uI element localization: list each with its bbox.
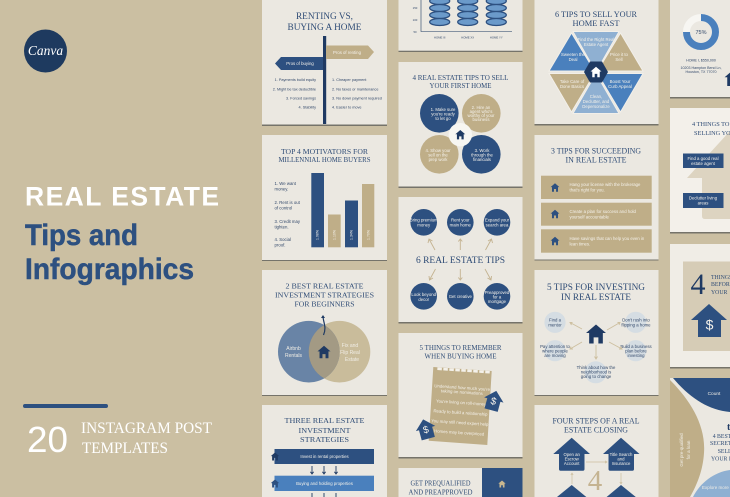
- axes: [421, 0, 512, 32]
- number 4: 4: [588, 465, 603, 497]
- tip 3: lean times.: [570, 242, 590, 246]
- list: renting: 4. Easier to move: [332, 106, 362, 110]
- circle labels: investing: [628, 353, 645, 358]
- logo: Canva: [24, 30, 67, 72]
- list: buying: 4. Stability: [298, 106, 316, 110]
- heading: tips and: Tips and: [25, 219, 138, 252]
- coin stacks: [430, 0, 506, 26]
- petal: 3: 4. Show your: [425, 148, 451, 153]
- title: GET PREQUALIFIED: [410, 478, 471, 488]
- panel: 4 things to consider: [670, 108, 730, 234]
- address text: Houston, TX 77070: [686, 70, 716, 74]
- circle labels: Build a business: [620, 344, 652, 349]
- panel: 2 best strategies: [262, 270, 387, 396]
- axis labels: 150: [413, 6, 418, 10]
- list: renting: 1. Cheaper payment: [332, 78, 367, 82]
- title: MILLENNIAL HOME BUYERS: [278, 155, 370, 164]
- side label: [679, 433, 691, 467]
- title: 4 REAL ESTATE TIPS TO SELL: [412, 74, 508, 82]
- light blue bottom shape: [693, 470, 730, 497]
- panel: 5 tips for investing: [534, 270, 658, 396]
- icon: house cut off: [725, 70, 730, 86]
- subtitle: INSTAGRAM POST: [81, 420, 213, 437]
- title: [288, 11, 362, 32]
- panel: 4 best secrets: [670, 378, 730, 497]
- tip box 2: areas: [698, 200, 708, 206]
- step house 3: [553, 485, 590, 497]
- title: 3 TIPS FOR SUCCEEDING: [551, 146, 641, 156]
- step house 1: Account: [564, 461, 580, 466]
- note paper: [429, 367, 493, 445]
- tip 1: that's right for you.: [570, 188, 605, 192]
- tip box 2: Declutter living: [689, 196, 718, 200]
- petal: 3: [420, 135, 459, 174]
- top label: Count: [708, 391, 721, 397]
- list: buying: 1. Payments build equity: [275, 78, 316, 82]
- petal: 1: to let go: [435, 116, 451, 121]
- petal: 3: sell on the: [428, 152, 448, 158]
- title: INVESTMENT STRATEGIES: [275, 290, 374, 300]
- panel: 6 real estate tips: [398, 197, 522, 324]
- note paper: Homes may be overpriced: [434, 428, 485, 437]
- hexagon labels: Price it to: [610, 52, 629, 57]
- title: THREE REAL ESTATE: [284, 416, 365, 425]
- hexagon labels: Done Basics: [560, 84, 584, 89]
- hexagon labels: Clean,: [590, 94, 602, 99]
- petal: 2: [462, 94, 501, 133]
- heading: infographics: Infographics: [25, 253, 194, 286]
- panel: 6 tips to sell fast: [534, 0, 658, 126]
- sign: pros of renting: Pros of renting: [333, 50, 362, 55]
- bottom circles: mortgage: [488, 299, 507, 304]
- tan side shape: [670, 380, 704, 497]
- circle labels: [540, 318, 652, 379]
- venn diagram: Fix and: [342, 343, 358, 349]
- title: STRATEGIES: [300, 435, 349, 444]
- petal: 2: 2. Hire an: [472, 105, 491, 110]
- title: 4 THINGS TO: [692, 121, 730, 128]
- circle labels: are moving: [544, 353, 566, 358]
- background house: [687, 131, 730, 219]
- hexagon labels: [560, 37, 632, 109]
- title: YOUR FIRST HOME: [430, 82, 492, 90]
- tip 1: Hang your license with the brokerage: [570, 182, 641, 187]
- title: 6 TIPS TO SELL YOUR: [555, 10, 638, 19]
- sign: pros of buying: Pros of buying: [286, 61, 314, 66]
- bar chart: 1.70%: [366, 230, 370, 240]
- title: IN REAL ESTATE: [561, 292, 632, 302]
- address text: HOME I, $550,000: [686, 58, 716, 62]
- title: [711, 275, 730, 296]
- venn diagram: Airbnb: [286, 346, 301, 352]
- blue side panel: [482, 468, 522, 497]
- panel: get prequalified: [398, 468, 522, 497]
- icon: dollar house: $: [706, 316, 714, 332]
- bar chart: 1.98%: [316, 230, 320, 240]
- step house 1: Escrow: [565, 456, 580, 462]
- bottom circles: Preapproved: [485, 290, 510, 295]
- hexagon labels: Take Care of: [560, 79, 585, 84]
- side label: Get pre-qualified: [679, 433, 684, 467]
- title: FOR BEGINNERS: [294, 300, 354, 308]
- bar: rental properties: Invest in rental properties: [300, 454, 349, 459]
- address text: 10203 Hampton Bend Ln,: [681, 66, 721, 70]
- bar chart: [311, 173, 374, 247]
- panel: four steps closing: [534, 405, 658, 497]
- count: 20: 20: [27, 419, 68, 460]
- tip 2: Create a plan for success and hold: [570, 209, 637, 214]
- panel: home price chart: [398, 0, 522, 52]
- petal: 2: business: [473, 117, 489, 122]
- tip 3: Have savings that can help you even in: [570, 236, 645, 241]
- title: AND PREAPPROVED: [408, 488, 473, 496]
- tip box 1: [683, 154, 724, 168]
- bar chart: 1.10%: [332, 230, 336, 240]
- title: BUYING A HOME: [288, 22, 362, 32]
- tip 2: [541, 203, 652, 226]
- petal: 4: through the: [471, 152, 493, 158]
- title: IN REAL ESTATE: [566, 156, 627, 164]
- icon: dollar house right: $: [489, 396, 498, 408]
- logo: Canva: Canva: [28, 43, 63, 58]
- list: renting: 2. No taxes or maintenance: [332, 88, 378, 92]
- top circles: Expand your: [485, 218, 510, 222]
- top circles: search area: [486, 222, 509, 228]
- panel: cover text: [23, 30, 219, 460]
- circle labels: neighborhood is: [581, 370, 611, 374]
- petal: 4: financials: [473, 157, 491, 162]
- circle labels: Pay attention to: [540, 344, 571, 349]
- title: [420, 343, 502, 360]
- panel: home price card: [670, 0, 730, 98]
- arrows: [310, 466, 338, 474]
- number 4: 4: [690, 268, 706, 301]
- bottom circles: for a: [493, 294, 502, 300]
- icon: dollar house left: $: [422, 424, 431, 436]
- panel: 3 tips for succeeding: [534, 135, 658, 260]
- hexagon labels: Boost Your: [610, 79, 631, 84]
- step house 2: Title Search: [610, 452, 633, 457]
- tip box 1: Find a good real: [687, 156, 719, 161]
- panel: 4 tips first home: [398, 62, 522, 188]
- list: of control: [274, 206, 292, 210]
- axis labels: HOME YY: [490, 36, 503, 40]
- step house 4: [603, 485, 640, 497]
- donut chart: 75%: [695, 30, 707, 36]
- petal: 1: 1. Make sure: [431, 107, 456, 112]
- side label: for a loan: [686, 440, 691, 459]
- circle labels: Don't rush into: [622, 318, 650, 322]
- petal: 4: 3. Work: [475, 148, 490, 153]
- title: 5 TIPS FOR INVESTING: [547, 282, 646, 292]
- bottom circles: Get creative: [449, 294, 472, 299]
- hexagon labels: Curb Appeal: [608, 84, 632, 89]
- tip box 1: estate agent: [691, 161, 716, 166]
- title: [692, 121, 730, 137]
- list: renting: [332, 78, 382, 110]
- venn diagram: Rentals: [285, 353, 302, 359]
- top circles: money: [417, 222, 431, 228]
- venn diagram: [278, 315, 370, 383]
- title: ESTATE CLOSING: [564, 426, 628, 434]
- petal: 2: agent who's: [470, 109, 492, 114]
- hexagon labels: Estate Agent: [584, 42, 609, 47]
- circle labels: mentor: [548, 322, 562, 328]
- bar chart: 1.34%: [350, 230, 354, 240]
- title: TOP 4 MOTIVATORS FOR: [281, 147, 368, 156]
- list: buying: 2. Might be tax deductible: [273, 88, 316, 92]
- heading: real estate: REAL ESTATE: [25, 182, 219, 212]
- note paper: Understand how much you're: [434, 383, 491, 392]
- note paper: You're living on roll-money: [436, 398, 487, 407]
- list: 2. Rent is out: [274, 200, 301, 205]
- circle labels: flipping a home: [621, 322, 651, 328]
- tip 1: [541, 176, 652, 199]
- top circles: [410, 209, 510, 236]
- top circles: Bring premium: [410, 218, 438, 222]
- step house 2: [603, 438, 640, 471]
- list: tighten.: [274, 224, 289, 230]
- venn diagram: Estate: [345, 357, 359, 363]
- tip box 2: [683, 193, 724, 208]
- circle labels: going to change: [581, 374, 612, 379]
- step house 2: and: [617, 456, 625, 462]
- address text: [681, 58, 721, 74]
- icon: gold house: [498, 480, 506, 488]
- arrows: [570, 322, 622, 359]
- step house 2: Insurance: [612, 461, 631, 466]
- title: [551, 146, 641, 164]
- petal: 1: you're ready: [431, 112, 456, 116]
- note paper: taking on nominations: [441, 388, 483, 396]
- list: [274, 181, 301, 248]
- subtitle: [81, 420, 213, 457]
- title: [275, 282, 374, 308]
- bar: buying and holding: Buying and holding properties: [296, 481, 353, 486]
- circle labels: Think about how the: [577, 365, 616, 370]
- title: [412, 74, 508, 90]
- list: 4. Social: [274, 237, 291, 242]
- title: [710, 422, 730, 462]
- title: WHEN BUYING HOME: [424, 352, 497, 360]
- list: proof.: [274, 242, 286, 248]
- sign post: [323, 36, 326, 124]
- hexagon labels: Find the Right Real: [578, 37, 614, 42]
- title: [555, 10, 638, 28]
- title: [278, 147, 370, 164]
- petal: 1: [420, 94, 459, 133]
- bottom circles: decor: [418, 297, 430, 302]
- list: buying: 3. Forced savings: [286, 96, 316, 100]
- icon: center house: [586, 324, 606, 344]
- title: [552, 416, 640, 434]
- list: 3. Credit may: [274, 219, 301, 224]
- title: [547, 282, 646, 302]
- arrows up: [428, 239, 492, 250]
- blue top shape: [673, 378, 730, 412]
- title: [284, 416, 365, 444]
- petal: 3: prep work: [429, 157, 448, 162]
- hexagon diagram: [549, 32, 643, 114]
- title: 6 REAL ESTATE TIPS: [416, 256, 505, 266]
- axis labels: 50: [413, 30, 417, 34]
- title: 5 THINGS TO REMEMBER: [420, 343, 502, 352]
- circle labels: where people: [542, 348, 569, 354]
- circle labels: Find a: [549, 318, 562, 322]
- circles: [544, 312, 646, 383]
- hexagon labels: Deal: [569, 57, 577, 62]
- panel: 4 things before: [670, 244, 730, 368]
- title: YOUR: [711, 290, 728, 296]
- list: renting: 3. No down payment required: [332, 96, 382, 100]
- bottom circles: Look beyond: [411, 292, 437, 297]
- tip 3: [541, 229, 652, 253]
- icon: house in white circle: [449, 123, 472, 146]
- circle labels: plan before: [625, 348, 647, 354]
- hexagon labels: Depersonalize: [582, 104, 610, 109]
- title: [408, 478, 473, 497]
- hexagon labels: Sweeten the: [561, 52, 586, 57]
- rule: [23, 404, 108, 408]
- title: INVESTMENT: [298, 426, 351, 435]
- inner tan panel: [683, 262, 730, 351]
- note paper: Ready to build a relationship: [433, 408, 488, 417]
- arrows: [310, 493, 338, 497]
- axis labels: HOME III: [434, 36, 446, 40]
- petal: 4: [462, 135, 501, 174]
- title: FOUR STEPS OF A REAL: [552, 416, 640, 426]
- tip 2: yourself accountable: [570, 214, 610, 220]
- title: 2 BEST REAL ESTATE: [286, 282, 364, 290]
- top circles: Rent your: [451, 218, 470, 222]
- title: HOME FAST: [572, 19, 620, 28]
- venn diagram: Flip Real: [340, 350, 360, 356]
- icon: center house: [584, 62, 608, 82]
- panel: top 4 motivators: [262, 135, 387, 261]
- panel: three strategies: [262, 405, 387, 497]
- title: RENTING VS,: [296, 11, 353, 21]
- step house 1: Open an: [563, 452, 581, 457]
- hexagon labels: Declutter, and: [583, 99, 610, 104]
- step house 1: [553, 438, 590, 471]
- panel: renting vs buying: [262, 0, 387, 126]
- subtitle: TEMPLATES: [82, 440, 168, 457]
- axis labels: 100: [413, 18, 418, 22]
- arrows: [571, 461, 622, 484]
- list: money.: [274, 186, 288, 192]
- list: buying: [273, 78, 316, 110]
- axis labels: [413, 6, 503, 40]
- axis labels: HOME XX: [461, 36, 474, 40]
- note paper: You may still need expert help: [431, 418, 489, 427]
- bottom label: Explore more: [702, 485, 729, 490]
- top circles: main home: [450, 222, 472, 228]
- arrows down: [429, 269, 492, 280]
- panel: 5 things to remember: [398, 333, 522, 458]
- hexagon labels: Sell: [615, 57, 623, 62]
- petal: 2: worthy of your: [468, 113, 495, 118]
- list: 1. We want: [274, 181, 297, 186]
- bottom circles: [410, 283, 510, 310]
